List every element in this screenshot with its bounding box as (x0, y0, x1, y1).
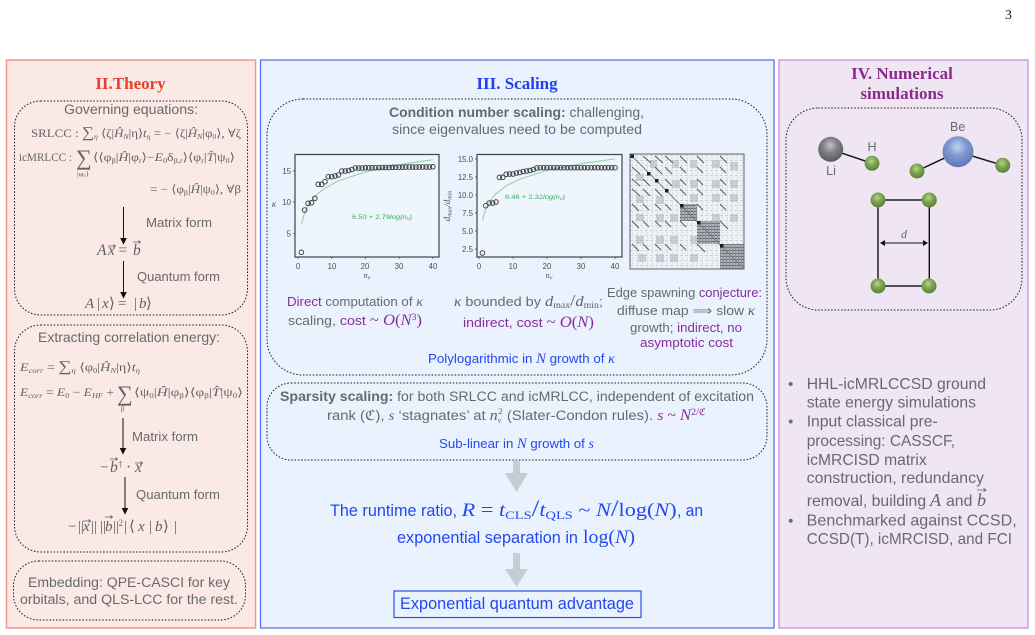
equation: Ecorr multireference: β (121, 405, 125, 413)
equation: Ecorr multireference: | (154, 387, 157, 399)
axis ticks and labels: 40 (429, 262, 438, 271)
text: kappa bounded: min (584, 300, 600, 310)
list: simulation details: Input classical pre- (807, 414, 938, 431)
text: sparsity description (280, 388, 754, 425)
text: edge spawning conjecture: growth; indirect, no (630, 320, 742, 335)
subheading: governing equations: Governing equations: (64, 101, 198, 117)
text: sparsity description: 2/ℭ (691, 407, 706, 418)
axis ticks and labels: 10.0 (458, 191, 474, 200)
axis ticks and labels: 10 (509, 262, 518, 271)
axis ticks and labels (442, 155, 620, 282)
equation: overlap norm: 2 (118, 518, 123, 528)
equation: icMRLCC first line (19, 145, 235, 179)
text: condition number intro: Condition number scaling: challenging, (389, 104, 644, 120)
axis ticks and labels: 10 (328, 262, 337, 271)
axis ticks and labels: 2.5 (462, 245, 474, 254)
equation: Ecorr single reference: E (19, 362, 29, 374)
equation: A x = b: x (107, 242, 115, 259)
equation: Ecorr multireference: 0 (65, 392, 70, 400)
equation: icMRLCC first line: | (204, 152, 207, 164)
equation: icMRLCC first line: r (139, 157, 142, 165)
axis ticks and labels (272, 167, 438, 282)
equation: Ecorr single reference: η (136, 367, 141, 375)
axis ticks and labels: n (546, 270, 550, 280)
axis ticks and labels: 0 (296, 262, 301, 271)
equation: SRLCC: Ĥ (187, 126, 198, 140)
text: kappa bounded: indirect, cost ~ O(N) (463, 314, 594, 331)
molecule: H4 rectangle: d (901, 227, 908, 241)
equation: SRLCC: η (147, 133, 151, 141)
equation: SRLCC: Ĥ (113, 126, 124, 140)
text: runtime ratio: t (539, 501, 547, 521)
text: runtime ratio: The runtime ratio, (330, 502, 457, 520)
equation: icMRLCC first line: r (84, 174, 86, 179)
list: simulation details: removal, building (807, 493, 931, 510)
equation: icMRLCC second line: Ĥ|ψ (191, 184, 210, 196)
equation: A|x> = |b>: ⟩ (109, 296, 115, 312)
equation: icMRLCC second line: | (188, 184, 191, 196)
list: simulation details: processing: CASSCF, (807, 433, 955, 450)
text: direct computation (287, 294, 423, 329)
chart: kappa versus n_v (272, 154, 439, 282)
arrow: sparsity to runtime ratio (505, 461, 528, 492)
text: sparsity description: (Slater-Condon rules). (503, 407, 657, 423)
equation: Ecorr single reference: corr (29, 367, 44, 375)
text: embedding description: Embedding: QPE-CASCI for key (28, 575, 231, 591)
text: runtime ratio (330, 496, 703, 548)
axis ticks and labels: 5.0 (462, 227, 474, 236)
equation: SRLCC: t (143, 128, 148, 140)
equation: overlap norm: ⟩ (163, 519, 169, 535)
equation: -b dagger dot x (100, 458, 142, 476)
equation: Ecorr multireference: β (204, 392, 209, 400)
equation: SRLCC: N (122, 133, 129, 141)
equation: Ecorr single reference: 0 (93, 367, 98, 375)
off-diagonal grey blocks (636, 160, 738, 262)
arrow: to matrix form (121, 207, 126, 244)
equation: SRLCC: N (196, 133, 203, 141)
list: simulation details: and (946, 493, 972, 510)
equation: Ecorr multireference: | (209, 387, 212, 399)
text: runtime ratio: exponential separation in (397, 529, 578, 547)
equation: Ecorr single reference: | (97, 362, 100, 374)
equation: A|x> = |b>: ⟩ (146, 296, 152, 312)
label: matrix form: Matrix form (146, 215, 212, 230)
fit equation: 6.46 + 2.32 log(n (505, 194, 558, 201)
data points (299, 164, 435, 255)
list: simulation details: icMRCISD matrix (807, 452, 927, 469)
equation: Ecorr single reference: Ĥ (99, 360, 111, 374)
equation: SRLCC: SRLCC : ∑ (31, 125, 93, 141)
heading: IV. Numerical simulations: IV. Numerical (851, 64, 953, 83)
axis ticks and labels: 40 (611, 262, 620, 271)
text: runtime ratio: CLS (505, 508, 532, 522)
equation: Ecorr multireference: E (56, 387, 65, 399)
heading: IV. Numerical simulations: simulations (860, 84, 944, 103)
text: direct computation: ) (416, 312, 422, 329)
arrow: to matrix form (120, 418, 126, 454)
equation: -b dagger dot x: † (118, 459, 123, 469)
fit equation: ) (408, 214, 412, 221)
molecule: BeH2 (910, 120, 1010, 178)
chart: sparsity matrix heat map (630, 154, 744, 269)
equation: A x = b: A (96, 242, 107, 259)
list: simulation details: Benchmarked against CCSD, (807, 513, 1017, 530)
text: embedding description (20, 575, 238, 608)
fit equation: v (407, 216, 410, 221)
equation: overlap norm: || (78, 519, 84, 535)
equation: -b dagger dot x: − (100, 459, 109, 476)
equation: overlap norm: − (68, 519, 76, 535)
main diagonal (630, 154, 744, 269)
axis ticks and labels: 12.5 (458, 173, 474, 182)
equation: icMRLCC second line: ⟩, ∀β (215, 184, 241, 196)
axis ticks and labels: 7.5 (462, 209, 474, 218)
equation: SRLCC: η (94, 133, 98, 141)
text: kappa bounded: max (553, 300, 571, 310)
equation: Ecorr multireference: β (179, 392, 184, 400)
label: matrix form: Matrix form (132, 429, 198, 444)
equation: Ecorr multireference: ⟩ (237, 387, 243, 399)
block: embedding (14, 561, 246, 620)
text: runtime ratio: N/log( N) (596, 496, 675, 521)
axis ticks and labels: /d (442, 199, 452, 208)
heading: III. Scaling: III. Scaling (476, 74, 558, 93)
axis ticks and labels: n (364, 270, 368, 280)
equation: overlap norm: | (124, 519, 127, 535)
molecule: LiH (818, 137, 880, 178)
axis ticks and labels: κ (272, 199, 277, 209)
text: runtime ratio: log(N) (583, 528, 635, 548)
text: edge spawning conjecture: diffuse map ⟹ slow κ (617, 303, 755, 319)
equation: A x = b: b (133, 242, 141, 259)
equation: icMRLCC first line: β,r (174, 157, 183, 165)
axis ticks and labels: v (550, 276, 553, 282)
panel: II. Theory (6, 60, 256, 628)
text: condition number intro: since eigenvalues need to be computed (392, 121, 642, 137)
equation: A x = b: = (118, 242, 127, 259)
equation: icMRLCC first line: E (154, 152, 163, 164)
list: simulation details: construction, redundancy (807, 470, 984, 487)
text: edge spawning conjecture: asymptotic cost (640, 335, 733, 350)
fit equation: 6.50 + 2.79 log(n (352, 214, 405, 221)
axis ticks and labels: max (448, 206, 454, 217)
axis ticks and labels: 15 (282, 167, 292, 176)
equation: SRLCC: = − ⟨ζ| (151, 128, 188, 140)
equation: icMRLCC first line: ⟨⟨φ (93, 152, 109, 164)
text: sparsity description: s ~ N (657, 407, 691, 424)
equation: icMRLCC first line: Ĥ|φ (118, 152, 137, 164)
molecule: LiH: Li (826, 164, 836, 178)
equation: Ecorr multireference: Ĥ|φ (157, 387, 177, 399)
text: sparsity description: rank (ℭ), s ‘stagnates’ at n (327, 407, 497, 424)
equation: icMRLCC second line: β (184, 189, 188, 197)
block: sparsity scaling (267, 383, 767, 460)
equation: SRLCC: |φ (202, 128, 213, 140)
list: simulation details: HHL-icMRLCCSD ground (807, 376, 986, 393)
text: direct computation: 3 (412, 312, 417, 322)
equation: Ecorr multireference: = (42, 387, 57, 399)
equation: icMRLCC first line: ⟩⟨φ (183, 152, 202, 164)
equation: icMRLCC first line: icMRLCC : (19, 152, 72, 164)
equation: Ecorr multireference: E (19, 387, 28, 399)
equation: Ecorr multireference: 0 (233, 392, 238, 400)
equation: icMRLCC first line: ⟩− (142, 152, 155, 164)
text: runtime ratio: R = t (462, 501, 504, 521)
equation: -b dagger dot x: b (110, 459, 118, 476)
text: sub-linear growth: Sub-linear in N growth of s (439, 436, 595, 452)
callout: exponential quantum advantage (394, 591, 641, 618)
list: simulation details: CCSD(T), icMRCISD, and FCI (807, 531, 1012, 548)
text: edge spawning conjecture (607, 285, 762, 350)
equation: A|x> = |b>: | (134, 296, 137, 312)
equation: overlap norm: || (113, 519, 119, 535)
equation: overlap norm: ⟨ (129, 519, 135, 535)
text: kappa bounded: d (575, 294, 584, 310)
heading: IV. Numerical simulations (851, 64, 953, 103)
label: quantum form: Quantum form (136, 487, 220, 502)
equation: overlap norm: x (82, 519, 90, 535)
arrow: to quantum form (121, 261, 126, 298)
equation: -b dagger dot x: · (126, 459, 131, 476)
molecule: H4 rectangle (870, 192, 937, 294)
equation: icMRLCC first line: 0 (163, 157, 168, 165)
page number: 3 (1005, 8, 1012, 23)
equation: Ecorr multireference: 0 (149, 392, 154, 400)
equation: Ecorr multireference: − (69, 387, 84, 399)
equation: Ecorr single reference: N (109, 367, 116, 375)
heading: II.Theory: II.Theory (95, 74, 166, 93)
text: runtime ratio: ~ (573, 501, 596, 521)
equation: icMRLCC second line: = − ⟨φ (150, 184, 180, 196)
fit equation: v (560, 196, 563, 201)
equation: Ecorr multireference (19, 381, 243, 413)
callout: exponential quantum advantage: Exponential quantum advantage (400, 595, 634, 613)
text: direct computation: scaling, cost ~ O(N (288, 312, 411, 329)
equation: Ecorr multireference: ⟨ψ (134, 387, 146, 399)
text: kappa bounded: ; (599, 294, 603, 309)
equation: A|x> = |b>: A (84, 296, 95, 312)
axis ticks and labels: 5 (287, 230, 292, 238)
label: quantum form: Quantum form (137, 269, 220, 284)
text: kappa bounded (454, 291, 603, 331)
chart: dmax over dmin versus n_v (442, 154, 622, 282)
equation: Ecorr single reference: |η⟩ (116, 362, 132, 374)
equation: icMRLCC first line: r (201, 157, 205, 165)
molecule: LiH: H (867, 140, 877, 154)
equation: icMRLCC first line: T̂|ψ (207, 152, 224, 164)
equation: Ecorr single reference: ⟨φ (76, 362, 93, 374)
text: runtime ratio: / (532, 496, 540, 521)
equation: icMRLCC first line: δ (167, 152, 174, 164)
axis ticks and labels: 10 (282, 198, 292, 207)
equation: Ecorr single reference: t (132, 362, 137, 374)
data points (480, 165, 617, 255)
equation: A|x> = |b>: b (139, 296, 147, 312)
equation: -b dagger dot x: x (134, 459, 142, 476)
equation: overlap norm: b (105, 519, 113, 535)
equation: icMRLCC first line: ⟩ (86, 171, 89, 178)
equation: Ecorr multireference: ∑ (117, 381, 133, 406)
text: sparsity description: 2 (498, 406, 503, 416)
equation: icMRLCC first line: 0 (226, 157, 230, 165)
equation: overlap norm: b (155, 519, 163, 535)
list: simulation details: b (977, 490, 986, 510)
text: kappa bounded: / (570, 291, 576, 310)
equation: Ecorr multireference: ⟩⟨φ (184, 387, 205, 399)
equation: A|x> = |b>: = (118, 296, 126, 312)
fit curve (482, 159, 615, 220)
panel: III. Scaling (260, 60, 774, 628)
equation: icMRLCC first line: ⟩ (230, 152, 235, 164)
off-diagonal streaks (632, 156, 728, 252)
text: condition number intro (389, 104, 644, 137)
equation: Ecorr single reference: η (72, 367, 76, 375)
equation: icMRLCC first line: | (116, 152, 118, 164)
equation: overlap norm: || (91, 519, 97, 535)
arrow: to quantum form (122, 477, 128, 514)
equation: overlap norm (68, 516, 177, 535)
equation: icMRLCC first line: |φ (77, 171, 82, 178)
text: direct computation: Direct computation of κ (287, 294, 423, 310)
equation: Ecorr multireference: T̂|ψ (212, 387, 230, 399)
axis ticks and labels: 15.0 (458, 155, 474, 164)
axis ticks and labels: 30 (395, 262, 404, 271)
equation: Ecorr multireference: corr (28, 392, 43, 400)
fit curve (301, 160, 433, 224)
text: polylogarithmic growth: Polylogarithmic in N growth of κ (428, 351, 615, 367)
equation: Ecorr multireference: HF (91, 392, 104, 400)
axis ticks and labels: min (448, 191, 454, 200)
diagonal dark blocks (680, 204, 744, 269)
block: governing equations (14, 101, 248, 315)
equation: A|x> = |b>: x (101, 296, 109, 312)
text: embedding description: orbitals, and QLS-LCC for the rest. (20, 592, 238, 608)
axis ticks and labels: d (442, 217, 452, 221)
axis ticks and labels: v (368, 276, 371, 282)
equation: Ecorr multireference: + (103, 387, 114, 399)
equation: SRLCC: 0 (212, 133, 217, 141)
axis ticks and labels: 20 (361, 262, 370, 271)
list: simulation details (789, 376, 1017, 548)
block: molecule diagrams (786, 108, 1022, 310)
equation: Ecorr single reference: ∑ (58, 359, 72, 375)
fit equation: ) (561, 194, 565, 201)
equation: Ecorr single reference: = (43, 362, 58, 374)
subheading: extracting correlation energy: Extracting correlation energy: (38, 329, 220, 345)
block: extracting correlation energy (14, 325, 248, 552)
equation: overlap norm: x (137, 519, 145, 535)
equation: icMRLCC first line: β (112, 157, 116, 165)
text: runtime ratio: , an (677, 502, 703, 520)
axis ticks and labels: 0 (477, 262, 482, 271)
equation: SRLCC: ⟨ζ| (98, 128, 114, 140)
equation: A|x> = |b>: | (97, 296, 100, 312)
text: runtime ratio: QLS (546, 508, 573, 522)
arrow: runtime ratio to advantage (505, 553, 528, 587)
equation: SRLCC: |η⟩ (129, 128, 143, 140)
equation: A x = b (96, 240, 141, 259)
equation: overlap norm: || (100, 519, 106, 535)
equation: Ecorr multireference: E (83, 387, 92, 399)
axis ticks and labels: 30 (577, 262, 586, 271)
block: condition number scaling (267, 99, 767, 375)
equation: icMRLCC second line: 0 (211, 189, 215, 197)
equation: overlap norm: | (174, 519, 177, 535)
text: kappa bounded: κ bounded by d (454, 294, 552, 310)
text: sparsity description: Sparsity scaling: for both SRLCC and icMRLCC, independent of excitation (280, 388, 754, 404)
list: simulation details: state energy simulations (807, 395, 976, 412)
panel: IV. Numerical simulations (779, 60, 1028, 628)
text: sparsity description: v (498, 416, 502, 425)
axis ticks and labels: 20 (543, 262, 552, 271)
equation: SRLCC: ⟩, ∀ζ (216, 128, 241, 140)
equation: icMRLCC first line: ∑ (76, 145, 92, 170)
list: simulation details: A (929, 490, 942, 510)
text: edge spawning conjecture: Edge spawning conjecture: (607, 285, 762, 300)
equation: overlap norm: | (149, 519, 152, 535)
molecule: BeH2: Be (950, 120, 965, 134)
